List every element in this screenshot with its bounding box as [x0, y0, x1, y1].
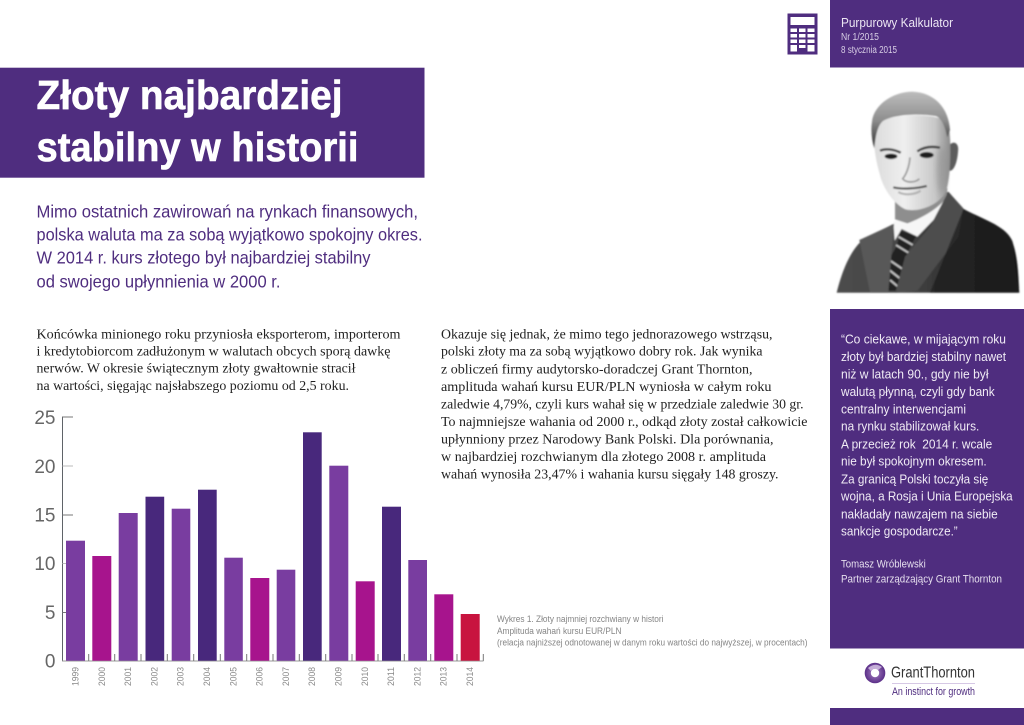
body text: right column: Okazuje się jednak, że mimo tego jednorazowego wstrząsu, [441, 326, 772, 341]
publication name: Purpurowy Kalkulator [841, 15, 954, 30]
logo mark [865, 663, 885, 683]
y axis labels: 5 [45, 603, 56, 624]
body text: right column: zaledwie 4,79%, czyli kurs wahał się w przedziale zaledwie 30 gr. [441, 396, 804, 411]
quote attribution: Tomasz Wróblewski [841, 559, 926, 571]
body text: right column: w najbardziej rozchwianym dla złotego 2008 r. amplituda [441, 449, 766, 464]
eyes [885, 154, 897, 159]
quote text: nie był spokojnym okresem. [841, 454, 987, 469]
ear [949, 143, 958, 171]
face [874, 115, 950, 210]
hair [871, 92, 950, 148]
y axis labels: 25 [34, 408, 56, 429]
body text: left column: Końcówka minionego roku przyniosła eksporterom, importerom [36, 326, 401, 341]
cheek shading [936, 147, 947, 193]
quote text: sankcje gospodarcze.” [841, 524, 958, 539]
chart caption: Amplituda wahań kursu EUR/PLN [497, 626, 622, 637]
nose [903, 157, 919, 182]
quote text: złoty był bardziej stabilny nawet [841, 349, 1006, 364]
issue number: Nr 1/2015 [841, 32, 879, 43]
year labels [70, 667, 475, 686]
icon: calculator [788, 14, 818, 54]
y axis labels: 0 [45, 652, 56, 673]
quote text: nakładały nawzajem na siebie [841, 506, 998, 521]
body text: left column: na wartości, sięgając najsłabszego poziomu od 2,5 roku. [36, 378, 349, 393]
year labels: 2011 [386, 667, 396, 686]
quote attribution: Partner zarządzający Grant Thornton [841, 573, 1002, 585]
chart caption: (relacja najniższej odnotowanej w danym roku wartości do najwyższej, w procentach) [497, 638, 808, 648]
axes and ticks [62, 416, 484, 661]
year labels: 2014 [465, 667, 475, 686]
body text: right column: z obliczeń firmy audytorsko-doradczej Grant Thornton, [441, 361, 752, 376]
chart caption: Wykres 1. Złoty najmniej rozchwiany w histori [497, 614, 664, 625]
quote text: Za granicą Polski toczyła się [841, 471, 988, 486]
logo: Grant Thornton [865, 663, 975, 698]
issue date: 8 stycznia 2015 [841, 45, 897, 56]
year labels: 1999 [70, 667, 80, 686]
body text: right column: wahań wynosiła 23,47% i wahania kursu sięgały 148 groszy. [441, 466, 778, 481]
y axis labels [34, 408, 56, 673]
quote text: A przecież rok 2014 r. wcale [841, 436, 992, 451]
bars [66, 432, 480, 661]
footer bar [830, 708, 1024, 725]
body text: right column: To najmniejsze wahania od 2000 r., odkąd złoty został całkowicie [441, 414, 808, 429]
subheading text: Mimo ostatnich zawirowań na rynkach finansowych, [36, 201, 418, 221]
necktie [889, 231, 916, 291]
year labels: 2005 [228, 667, 238, 686]
body text: left column: nerwów. W okresie świątecznym złoty gwałtownie stracił [36, 360, 356, 376]
mouth [893, 186, 927, 188]
subheading text: od swojego upłynnienia w 2000 r. [36, 271, 280, 291]
body text: right column: polski złoty ma za sobą wyjątkowo dobry rok. Jak wynika [441, 344, 762, 359]
title banner [0, 68, 424, 178]
body text: left column: i kredytobiorcom zadłużonym w walutach obcych sporą dawkę [36, 343, 390, 358]
lapels [895, 192, 963, 293]
year labels: 2002 [149, 667, 159, 686]
neck [895, 188, 947, 223]
quote text: walutą płynną, czyli gdy bank [840, 384, 995, 399]
quote text: na rynku stabilizował kurs. [841, 419, 979, 434]
quote text: niż w latach 90., gdy nie był [841, 366, 989, 381]
year labels: 2010 [360, 667, 370, 686]
year labels: 2008 [307, 667, 317, 686]
body text: right column: upłynniony przez Narodowy Bank Polski. Dla porównania, [441, 431, 774, 446]
year labels: 2013 [439, 667, 449, 686]
y axis labels: 20 [34, 457, 56, 478]
year labels: 2000 [97, 667, 107, 686]
year labels: 2012 [412, 667, 422, 686]
eyebrows [880, 147, 940, 153]
panel: quote [830, 309, 1024, 648]
subheading text: W 2014 r. kurs złotego był najbardziej stabilny [36, 248, 371, 268]
year labels: 2003 [176, 667, 186, 686]
shirt collar [893, 197, 947, 241]
subheading text: polska waluta ma za sobą wyjątkowo spokojny okres. [36, 224, 422, 244]
portrait photo [837, 92, 1019, 293]
year labels: 2001 [123, 667, 133, 686]
quote text: “Co ciekawe, w mijającym roku [841, 331, 1006, 346]
y axis labels: 15 [34, 506, 56, 526]
y axis labels: 10 [34, 554, 56, 575]
title: stabilny w historii [36, 124, 358, 170]
panel: publication header [830, 0, 1024, 68]
year labels: 2004 [202, 667, 212, 686]
quote text: centralny interwencjami [841, 401, 966, 416]
body text: right column: amplituda wahań kursu EUR/PLN wyniosła w całym roku [441, 379, 772, 394]
jacket [837, 192, 1019, 293]
logo tagline: An instinct for growth [892, 686, 975, 698]
bar chart [34, 408, 484, 686]
title: Złoty najbardziej [36, 72, 342, 118]
logo wordmark: GrantThornton [891, 665, 975, 682]
year labels: 2006 [255, 667, 265, 686]
year labels: 2007 [281, 667, 291, 686]
year labels: 2009 [334, 667, 344, 686]
